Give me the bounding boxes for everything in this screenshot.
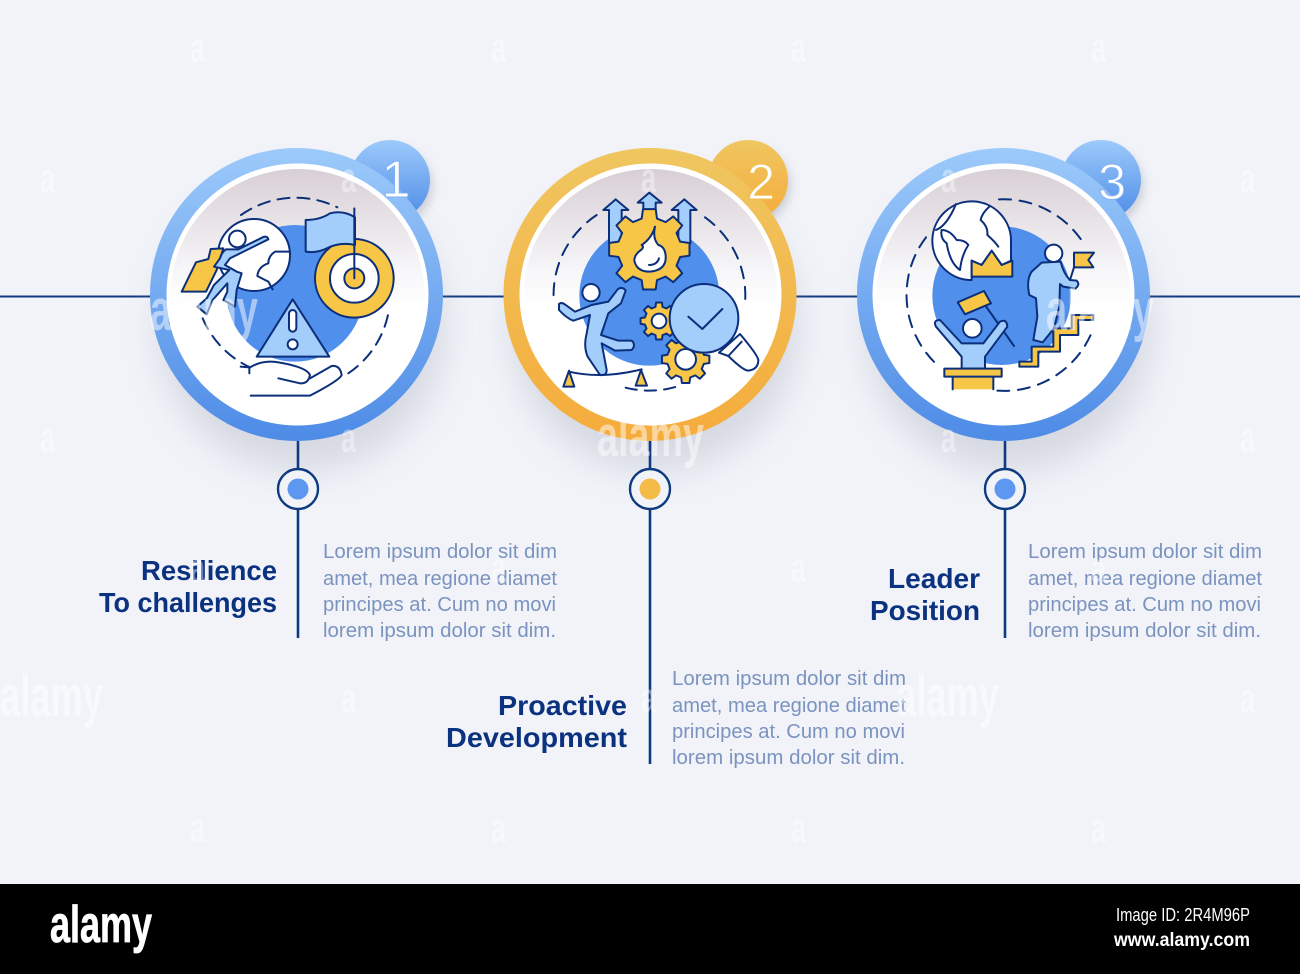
text block: step 1 description: [323, 541, 557, 642]
badge 2: [504, 140, 796, 441]
text block: step 3 description: lorem ipsum dolor sit dim.: [1028, 620, 1261, 642]
watermarks: a: [1240, 154, 1255, 201]
watermarks: alamy: [150, 278, 258, 343]
footer image id: Image ID: 2R4M96P: [1116, 905, 1250, 925]
watermarks: a: [791, 544, 806, 591]
connector and marker: step 1: [278, 441, 318, 638]
watermarks: a: [341, 674, 356, 721]
panel: step 2 circle: [504, 140, 797, 470]
icon: proactive development, gears, balance and magnifier: [554, 193, 758, 391]
watermarks: a: [341, 154, 356, 201]
watermarks: a: [190, 804, 205, 851]
text block: step 1 description: amet, mea regione diamet: [323, 568, 557, 590]
watermarks: alamy: [1046, 278, 1154, 343]
text block: step 2 description: lorem ipsum dolor sit dim.: [672, 747, 905, 769]
watermarks: a: [641, 154, 656, 201]
heading: Resilience To challenges: To challenges: [99, 587, 277, 618]
watermarks: a: [941, 414, 956, 461]
watermarks: alamy: [597, 404, 704, 469]
panel: step 1 circle: [150, 140, 444, 470]
watermarks: a: [491, 804, 506, 851]
text block: step 2 description: principes at. Cum no movi: [672, 721, 905, 743]
footer url: www.alamy.com: [1113, 930, 1250, 951]
watermarks: a: [190, 544, 205, 591]
heading: Resilience To challenges: Resilience: [141, 555, 277, 586]
text block: step 2 description: [672, 668, 906, 769]
text block: step 3 description: amet, mea regione diamet: [1028, 568, 1262, 590]
text block: step 1 description: Lorem ipsum dolor sit dim: [323, 541, 557, 563]
text block: step 2 description: amet, mea regione diamet: [672, 695, 906, 717]
badge 1: [150, 140, 443, 441]
text block: step 3 description: principes at. Cum no movi: [1028, 594, 1261, 616]
text block: step 1 description: lorem ipsum dolor sit dim.: [323, 620, 556, 642]
watermarks: a: [641, 674, 656, 721]
watermarks: a: [1091, 24, 1106, 71]
text block: step 3 description: [1028, 541, 1262, 642]
heading: Proactive Development: Proactive: [498, 690, 627, 721]
icon: leader position, globe, crown, stairs and podium: [907, 199, 1094, 391]
watermarks: a: [1091, 544, 1106, 591]
connector and marker: step 2: [630, 441, 670, 764]
panel: step 3 circle: [857, 140, 1151, 470]
watermarks: a: [791, 804, 806, 851]
icon: resilience, climber, target and warning: [182, 198, 394, 396]
heading: Resilience To challenges: [99, 555, 277, 618]
watermarks: alamy: [896, 664, 999, 729]
text block: step 2 description: Lorem ipsum dolor sit dim: [672, 668, 906, 690]
watermarks: a: [40, 414, 55, 461]
heading: Leader Position: Position: [870, 595, 980, 626]
connector and marker: step 3: [985, 441, 1025, 638]
watermarks: a: [1091, 804, 1106, 851]
heading: Leader Position: Leader: [888, 563, 980, 594]
watermarks: a: [190, 24, 205, 71]
text block: step 3 description: Lorem ipsum dolor sit dim: [1028, 541, 1262, 563]
horizontal timeline: [0, 296, 1300, 298]
watermarks: a: [941, 154, 956, 201]
badge 3: 3: [1098, 154, 1126, 210]
footer logo: alamy: [50, 896, 152, 954]
watermarks: alamy: [0, 664, 103, 729]
text block: step 1 description: principes at. Cum no movi: [323, 594, 556, 616]
watermarks: a: [791, 24, 806, 71]
footer bar: [0, 884, 1300, 974]
watermarks: a: [1240, 674, 1255, 721]
badge 3: [857, 140, 1150, 441]
watermarks: a: [491, 24, 506, 71]
badge 2: 2: [747, 154, 775, 210]
watermarks: a: [40, 154, 55, 201]
heading: Leader Position: [870, 563, 980, 626]
badge 1: 1: [382, 151, 410, 209]
watermarks: a: [491, 544, 506, 591]
heading: Proactive Development: [446, 690, 627, 753]
watermarks: a: [1240, 414, 1255, 461]
heading: Proactive Development: Development: [446, 722, 627, 753]
watermarks: a: [341, 414, 356, 461]
